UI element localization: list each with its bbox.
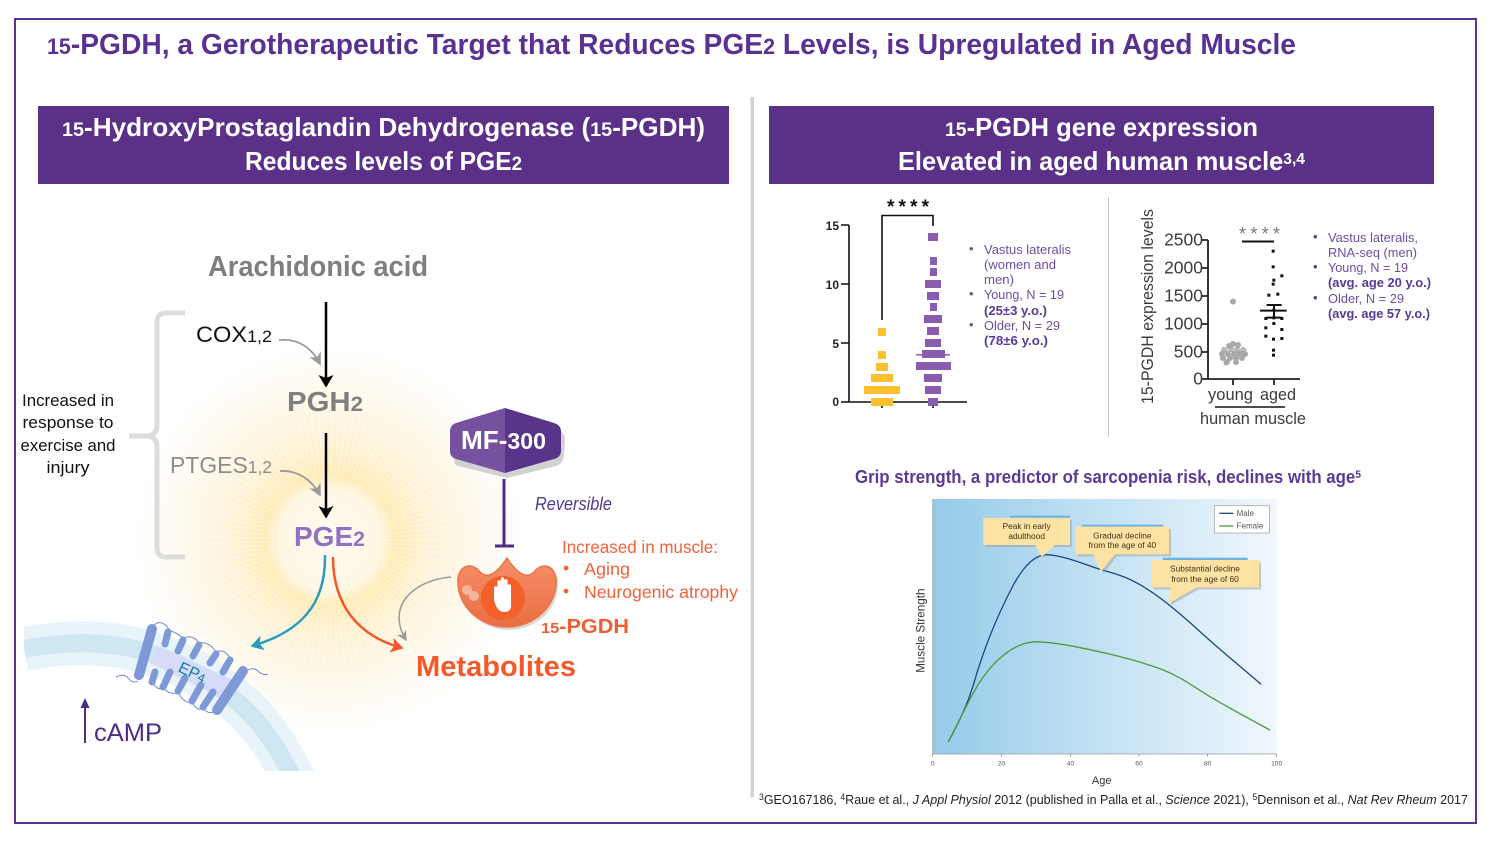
chart: muscle strength by age: 60 (1135, 761, 1143, 768)
footnote: Dennison et al., (1257, 792, 1348, 807)
PGE2: PGE2 (294, 521, 365, 552)
chart divider (1108, 197, 1109, 437)
callout: peak (983, 516, 1072, 558)
callout: gradual: from the age of 40 (1089, 540, 1156, 550)
male curve (948, 555, 1261, 742)
footnote: 3 (759, 792, 764, 802)
chart: dot plot women and men: 10 (826, 278, 839, 292)
chart: muscle strength by age: 20 (998, 761, 1005, 768)
legend: second dot plot: • (1313, 259, 1318, 274)
chart: 15-PGDH expression: 15-PGDH expression levels (1139, 209, 1157, 404)
arrow: arachidonic acid to PGH2 (325, 302, 327, 386)
arrow: PTGES (280, 471, 320, 495)
callout: gradual (1076, 525, 1171, 573)
right heading banner (769, 106, 1434, 184)
right heading banner: Elevated in aged human muscle (898, 146, 1292, 176)
legend: first dot plot (969, 241, 1071, 348)
chart: muscle strength by age (915, 499, 1283, 787)
arrow: 15-PGDH to metabolites (399, 577, 451, 640)
Metabolites: Metabolites (416, 651, 576, 683)
muscle increase list: Increased in muscle: (562, 537, 718, 557)
legend: first dot plot: Older, N = 29 (984, 318, 1060, 333)
legend: second dot plot: Young, N = 19 (1328, 260, 1408, 275)
15-PGDH label: 15-PGDH (541, 616, 629, 638)
arrow: COX (279, 340, 320, 364)
bracket note: exercise and (20, 436, 116, 455)
chart legend: Female (1237, 522, 1264, 531)
EP4 receptor: EP4 (176, 659, 208, 687)
young bars (864, 328, 900, 406)
left heading banner (38, 106, 729, 184)
x labels: young (1208, 385, 1253, 404)
axis title: muscle strength: Muscle Strength (915, 589, 928, 673)
female curve (948, 642, 1270, 742)
callout: substantial: Substantial decline (1170, 564, 1240, 574)
bracket note: response to (22, 413, 114, 432)
legend: first dot plot: Young, N = 19 (984, 287, 1064, 302)
legend: first dot plot: • (969, 241, 974, 256)
cell membrane (24, 643, 298, 790)
legend: first dot plot: Vastus lateralis (984, 242, 1071, 257)
aged dots (1260, 250, 1287, 357)
callout: gradual: Gradual decline (1093, 530, 1152, 540)
chart: dot plot women and men: 0 (832, 395, 839, 409)
bracket note: Increased in (22, 391, 114, 410)
bracket note: injury (46, 458, 90, 477)
chart: 15-PGDH expression: 1000 (1164, 314, 1203, 334)
muscle increase list: Neurogenic atrophy (584, 582, 738, 602)
title: 15-PGDH, a Gerotherapeutic Target that Reduces PGE2 Levels, is Upregulated in Aged Muscle (47, 29, 1296, 61)
callout: peak: Peak in early (1003, 521, 1052, 531)
grip strength heading: Grip strength, a predictor of sarcopenia risk, declines with age (855, 467, 1390, 487)
legend: second dot plot: Vastus lateralis, (1328, 230, 1418, 245)
bracket (129, 313, 185, 557)
chart: dot plot women and men (826, 197, 967, 409)
legend: second dot plot: (avg. age 57 y.o.) (1328, 306, 1430, 321)
chart: muscle strength by age: 100 (1271, 761, 1283, 768)
inhibition line (495, 479, 514, 546)
legend: first dot plot: (women and (984, 257, 1056, 272)
legend: first dot plot: (78±6 y.o.) (984, 333, 1048, 348)
chart: 15-PGDH expression: 0 (1193, 368, 1203, 388)
callout: substantial (1152, 558, 1261, 605)
muscle increase list: Aging (584, 559, 630, 579)
center divider (750, 97, 754, 797)
legend: second dot plot: • (1313, 290, 1318, 305)
arrow: PGE2 to metabolites (333, 557, 402, 648)
arrow: PGE2 to EP4 (252, 555, 325, 646)
chart: dot plot women and men: 15 (826, 219, 839, 233)
legend: first dot plot: men) (984, 272, 1014, 287)
chart: 15-PGDH expression: 1500 (1164, 286, 1203, 306)
muscle increase list: • (563, 581, 569, 601)
panel: right gene expression (759, 106, 1468, 807)
footnote: GEO167186, (764, 792, 840, 807)
footnote: 5 (1252, 792, 1257, 802)
legend: second dot plot: • (1313, 229, 1318, 244)
right heading banner: 3,4 (1283, 151, 1305, 168)
PGE2 glow (135, 345, 525, 735)
icon: 15-PGDH enzyme (458, 558, 558, 630)
chart: 15-PGDH expression (1139, 209, 1306, 428)
COX label: COX1,2 (196, 322, 272, 347)
x labels: aged (1260, 385, 1296, 404)
callout: substantial: from the age of 60 (1171, 574, 1239, 584)
legend: second dot plot: (avg. age 20 y.o.) (1328, 275, 1431, 290)
right heading banner: 15-PGDH gene expression (945, 112, 1258, 142)
left heading banner: Reduces levels of PGE2 (245, 146, 522, 176)
chart: 15-PGDH expression: 2500 (1164, 230, 1203, 250)
footnote: Nat Rev Rheum 2017 (1348, 792, 1469, 807)
arrow: PGH2 to PGE2 (325, 433, 327, 517)
young dots (1219, 298, 1248, 366)
chart: 15-PGDH expression: 2000 (1164, 258, 1203, 278)
significance: **** (1239, 224, 1280, 244)
chart: 15-PGDH expression: 500 (1174, 342, 1203, 362)
axis title: age: Age (1092, 775, 1111, 787)
left heading banner: 15-HydroxyProstaglandin Dehydrogenase (15-PGDH) (62, 112, 705, 142)
older bars (916, 233, 951, 406)
chart: muscle strength by age: 80 (1204, 761, 1212, 768)
footnote: J Appl Physiol 2012 (published in Palla et al., Science 2021), (913, 792, 1250, 807)
grip strength heading: 5 (1355, 469, 1361, 481)
legend: second dot plot: Older, N = 29 (1328, 291, 1404, 306)
significance bracket: **** (887, 197, 930, 218)
bracket note (20, 391, 116, 477)
MF-300 badge (450, 408, 565, 478)
chart legend (1214, 505, 1269, 533)
legend: second dot plot (1313, 229, 1431, 321)
x labels (1200, 385, 1306, 428)
panel: left pathway (20, 106, 738, 790)
legend: first dot plot: • (969, 286, 974, 301)
EP4 receptor (116, 623, 268, 713)
legend: second dot plot: RNA-seq (men) (1328, 245, 1417, 260)
footnote: Raue et al., (845, 792, 913, 807)
chart: dot plot women and men: 5 (832, 337, 839, 351)
callout: peak: adulthood (1008, 531, 1045, 541)
cAMP label: cAMP (94, 719, 162, 747)
chart: muscle strength by age: 40 (1067, 761, 1074, 768)
Arachidonic acid: Arachidonic acid (208, 251, 428, 283)
footnote: 4 (840, 792, 845, 802)
muscle increase list (562, 537, 738, 602)
cAMP up arrow (80, 698, 90, 743)
PGH2: PGH2 (287, 386, 363, 417)
x labels: human muscle (1200, 409, 1306, 428)
muscle increase list: • (563, 558, 569, 578)
chart: muscle strength by age: 0 (931, 761, 935, 768)
MF-300 badge: MF-300 (461, 425, 546, 455)
PTGES label: PTGES1,2 (170, 452, 272, 478)
significance bracket (882, 197, 933, 320)
legend: first dot plot: • (969, 317, 974, 332)
legend: first dot plot: (25±3 y.o.) (984, 303, 1047, 318)
Reversible: Reversible (535, 494, 612, 514)
chart legend: Male (1237, 509, 1255, 518)
